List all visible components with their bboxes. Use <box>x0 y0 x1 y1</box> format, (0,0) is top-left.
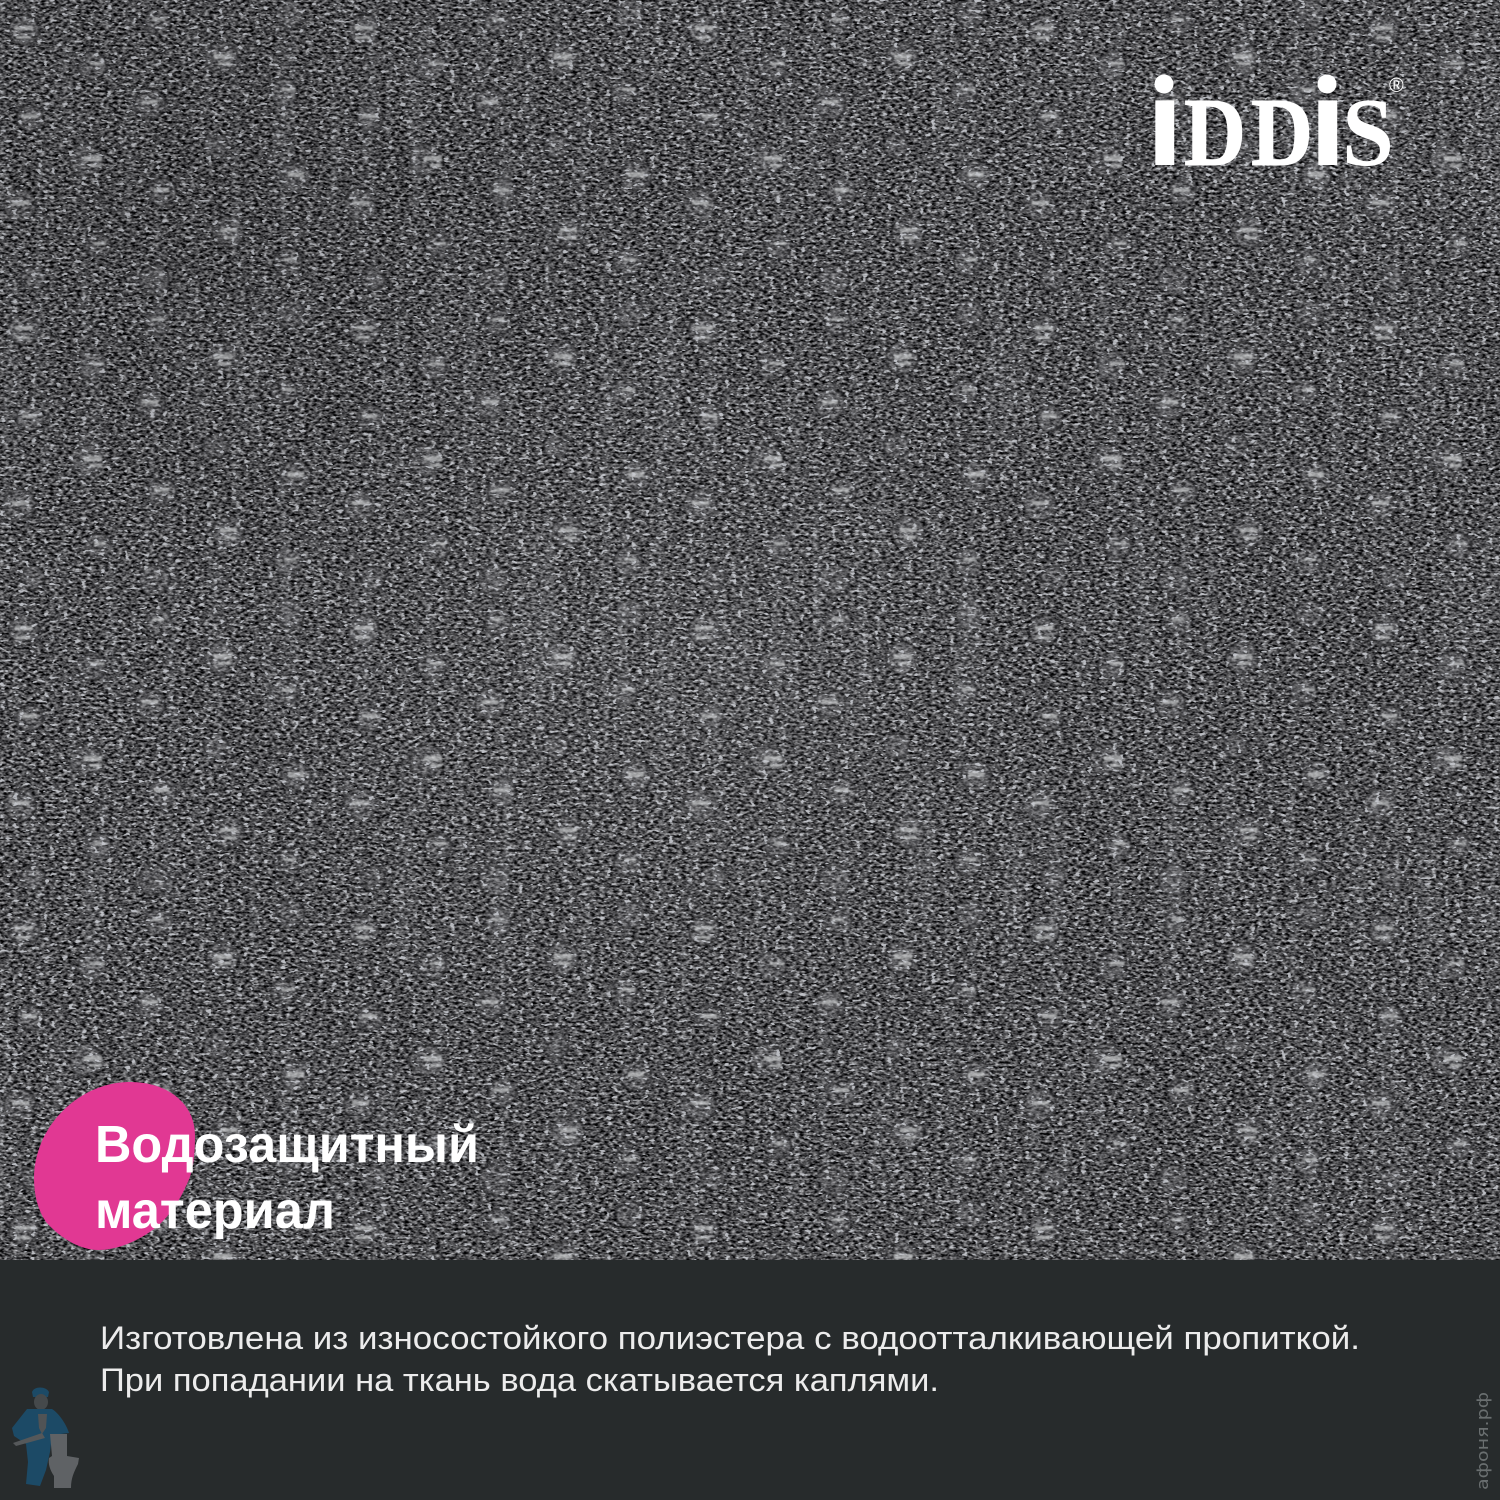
logo: IDDIS: D <box>1251 79 1313 187</box>
logo: IDDIS: ® <box>1389 75 1404 97</box>
heading: waterproof material: Водозащитный <box>95 1116 479 1174</box>
heading: waterproof material <box>95 1116 479 1240</box>
icon: pink blob <box>34 1082 195 1250</box>
body text: При попадании на ткань вода скатывается каплями. <box>100 1362 939 1398</box>
icon: plumber with toilet watermark <box>12 1388 79 1488</box>
footer band <box>0 1260 1500 1500</box>
logo: IDDIS <box>1146 74 1404 187</box>
logo: IDDIS: D <box>1184 79 1246 187</box>
logo: IDDIS: I <box>1310 80 1346 186</box>
heading: waterproof material: материал <box>95 1182 335 1240</box>
body text <box>100 1320 1360 1398</box>
logo: IDDIS: S <box>1342 79 1394 187</box>
watermark: site name: афоня.рф <box>1473 1392 1492 1490</box>
body text: Изготовлена из износостойкого полиэстера с водоотталкивающей пропиткой. <box>100 1320 1360 1356</box>
logo: IDDIS: I <box>1146 80 1183 186</box>
